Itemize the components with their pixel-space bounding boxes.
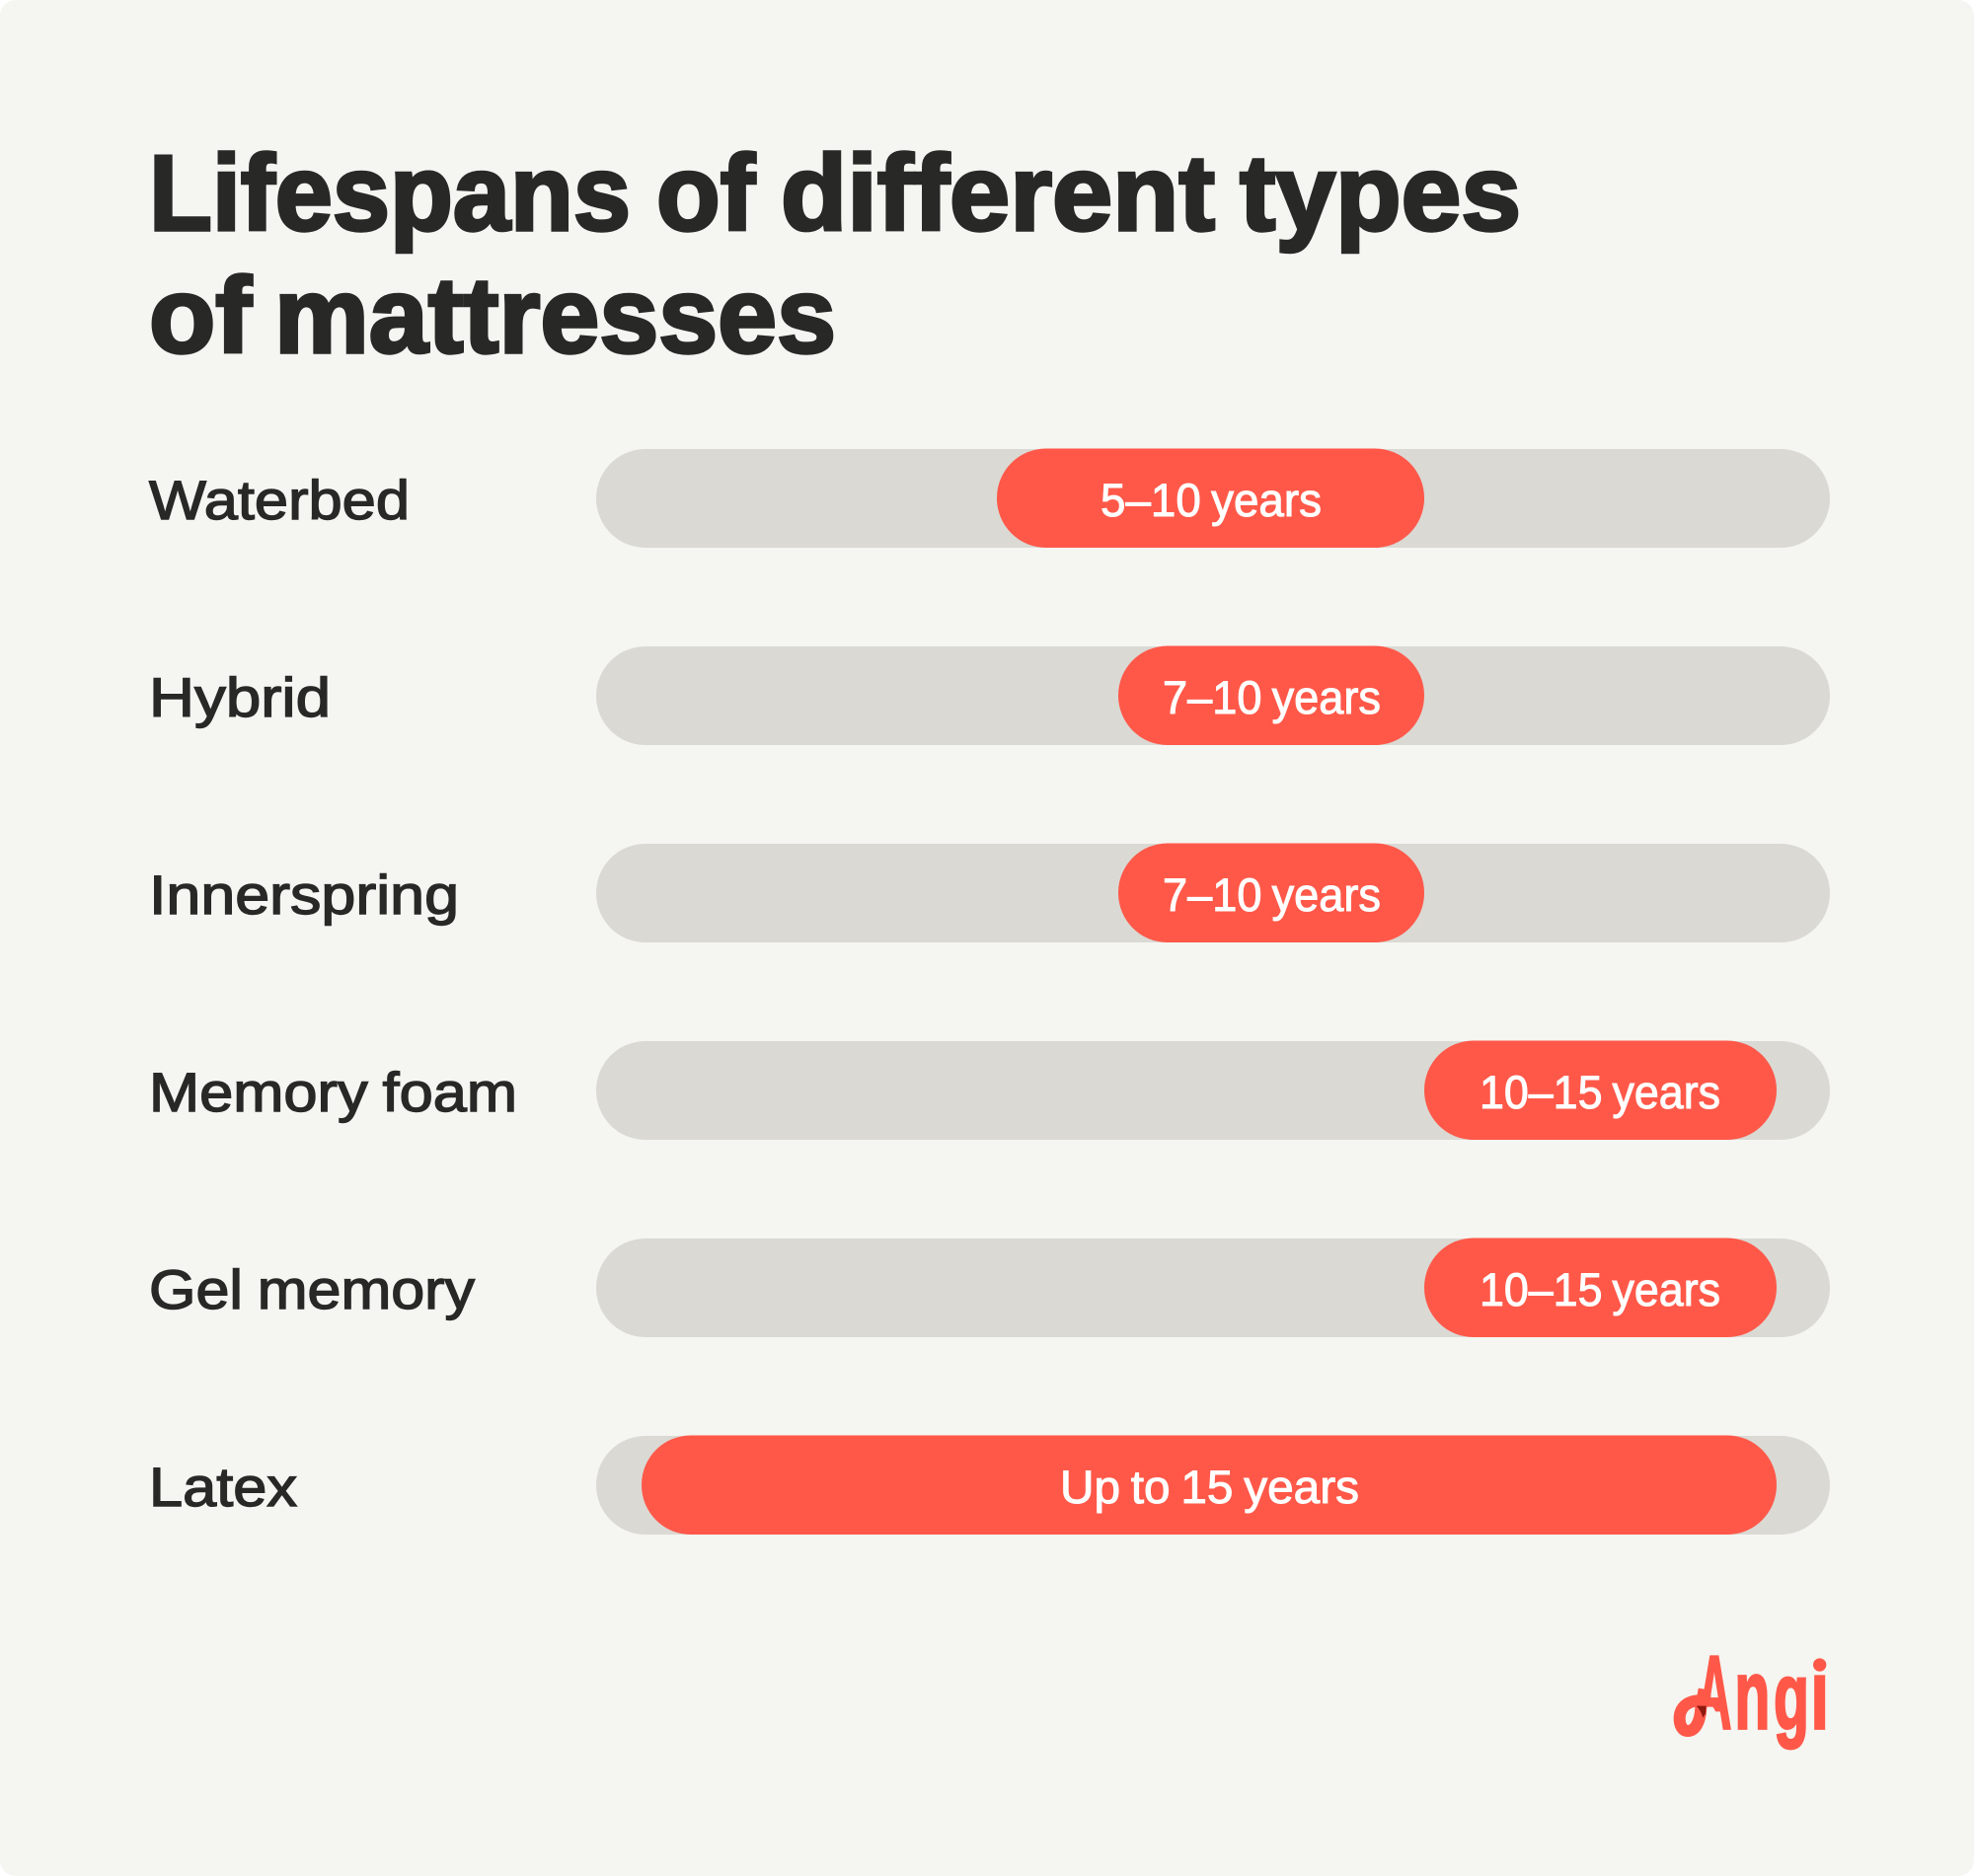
- row: Latex: Latex: [149, 1456, 297, 1518]
- title: [149, 133, 1521, 376]
- logo: Angi: n: [1734, 1640, 1770, 1751]
- title: Lifespans: [149, 133, 631, 254]
- row: Latex: Up to 15 years: [1060, 1461, 1359, 1513]
- chart: mattress lifespans: [149, 448, 1830, 1535]
- logo: Angi: g: [1774, 1644, 1809, 1750]
- row: Innerspring: [149, 843, 1830, 942]
- row: Gel memory: Gel memory: [149, 1258, 475, 1320]
- title: types: [1240, 133, 1521, 254]
- row: Gel memory: [149, 1238, 1830, 1337]
- row: Innerspring: Innerspring: [149, 863, 459, 926]
- row: Latex: [149, 1435, 1830, 1535]
- row: Memory foam: 10–15 years: [1480, 1066, 1720, 1118]
- row: Waterbed: Waterbed: [149, 469, 410, 531]
- row: Waterbed: [149, 448, 1830, 548]
- title: mattresses: [274, 256, 836, 376]
- title: of: [656, 133, 756, 254]
- row: Gel memory: 10–15 years: [1480, 1263, 1720, 1315]
- row: Waterbed: 5–10 years: [1101, 474, 1322, 526]
- logo: Angi: A: [1697, 1635, 1731, 1752]
- title: different: [781, 133, 1215, 254]
- row: Memory foam: [149, 1040, 1830, 1140]
- row: Innerspring: 7–10 years: [1163, 868, 1381, 921]
- row: Memory foam: Memory foam: [149, 1061, 517, 1123]
- logo: Angi: i: [1810, 1640, 1829, 1751]
- row: Hybrid: 7–10 years: [1163, 671, 1381, 723]
- logo: Angi: [1680, 1635, 1831, 1752]
- title: of: [149, 256, 253, 376]
- row: Hybrid: Hybrid: [149, 666, 331, 728]
- row: Hybrid: [149, 645, 1830, 745]
